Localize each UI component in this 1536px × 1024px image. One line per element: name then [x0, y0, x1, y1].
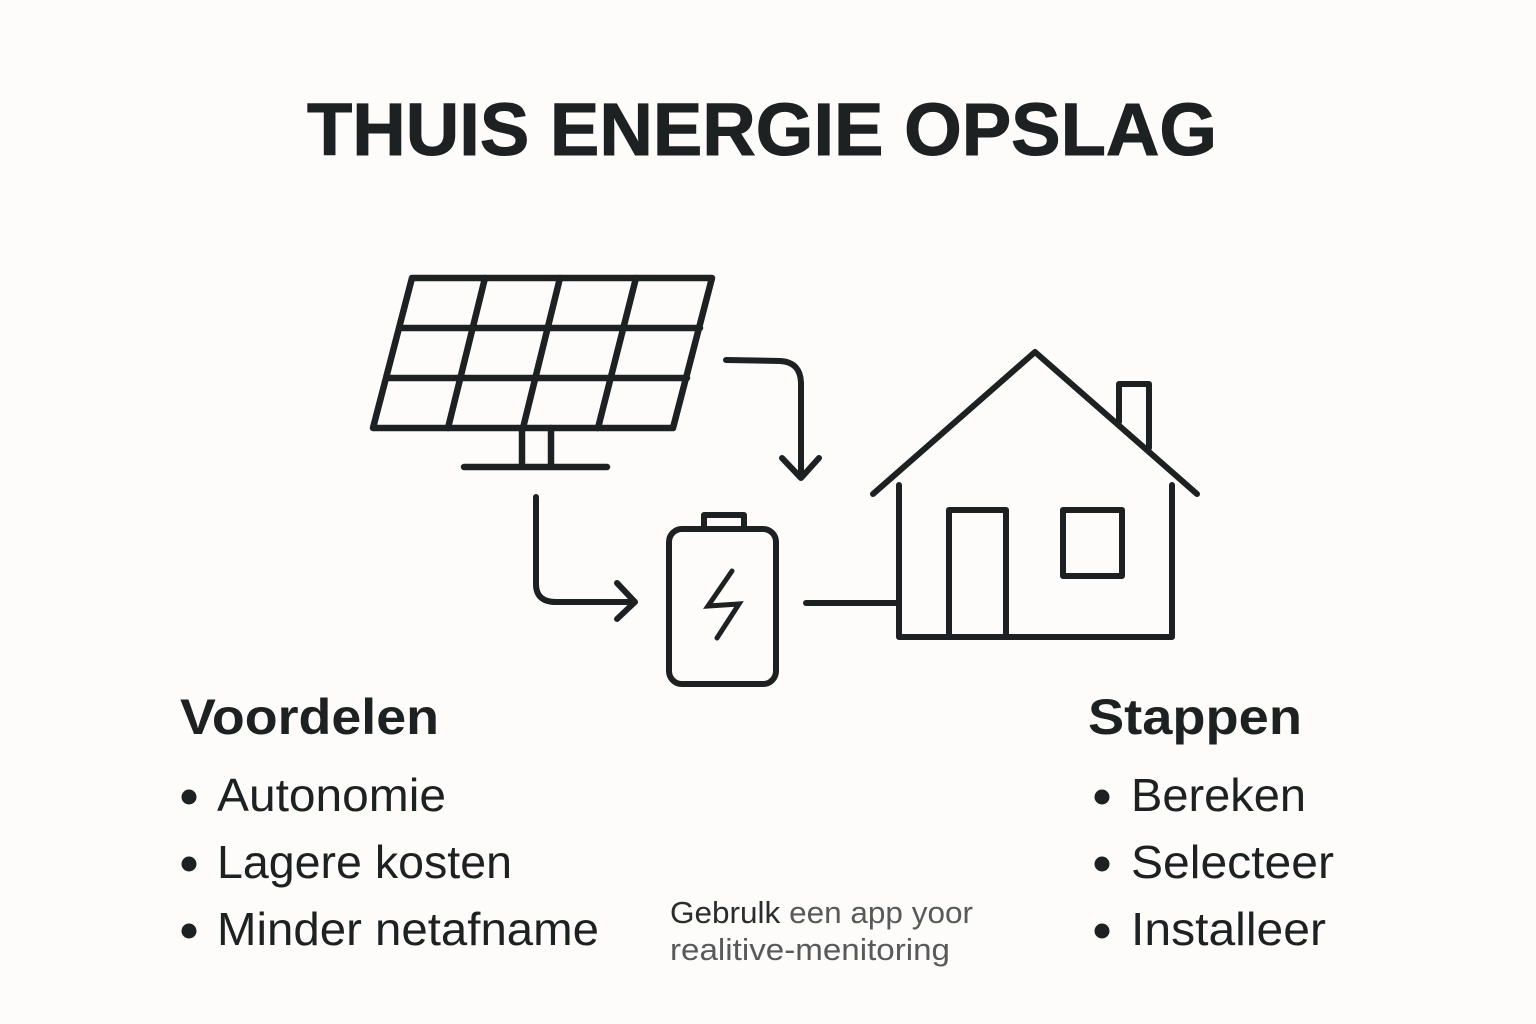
title: THUIS ENERGIE OPSLAG [307, 88, 1217, 171]
list item: autonomie: Autonomie [217, 769, 446, 821]
list item: installeer: Installeer [1131, 903, 1326, 955]
panel: voordelen [180, 689, 599, 955]
heading: voordelen: Voordelen [180, 689, 439, 745]
icon: battery [669, 515, 776, 684]
note: app monitoring: realitive-menitoring [670, 932, 950, 967]
list item: selecteer: Selecteer [1131, 836, 1334, 888]
list item: lagere kosten: Lagere kosten [217, 836, 512, 888]
list item: bereken: Bereken [1131, 769, 1306, 821]
note: app monitoring: Gebrulk een app yoor [670, 895, 973, 930]
arrow: solar panel to house [726, 360, 819, 478]
list item: minder netafname: Minder netafname [217, 903, 599, 955]
arrow: solar panel to battery [536, 497, 635, 619]
heading: stappen: Stappen [1088, 689, 1302, 745]
connector: battery to house [806, 600, 897, 606]
note: app monitoring [670, 895, 973, 967]
icon: solar panel [373, 278, 712, 467]
panel: stappen [1088, 689, 1334, 955]
icon: house [873, 352, 1197, 637]
